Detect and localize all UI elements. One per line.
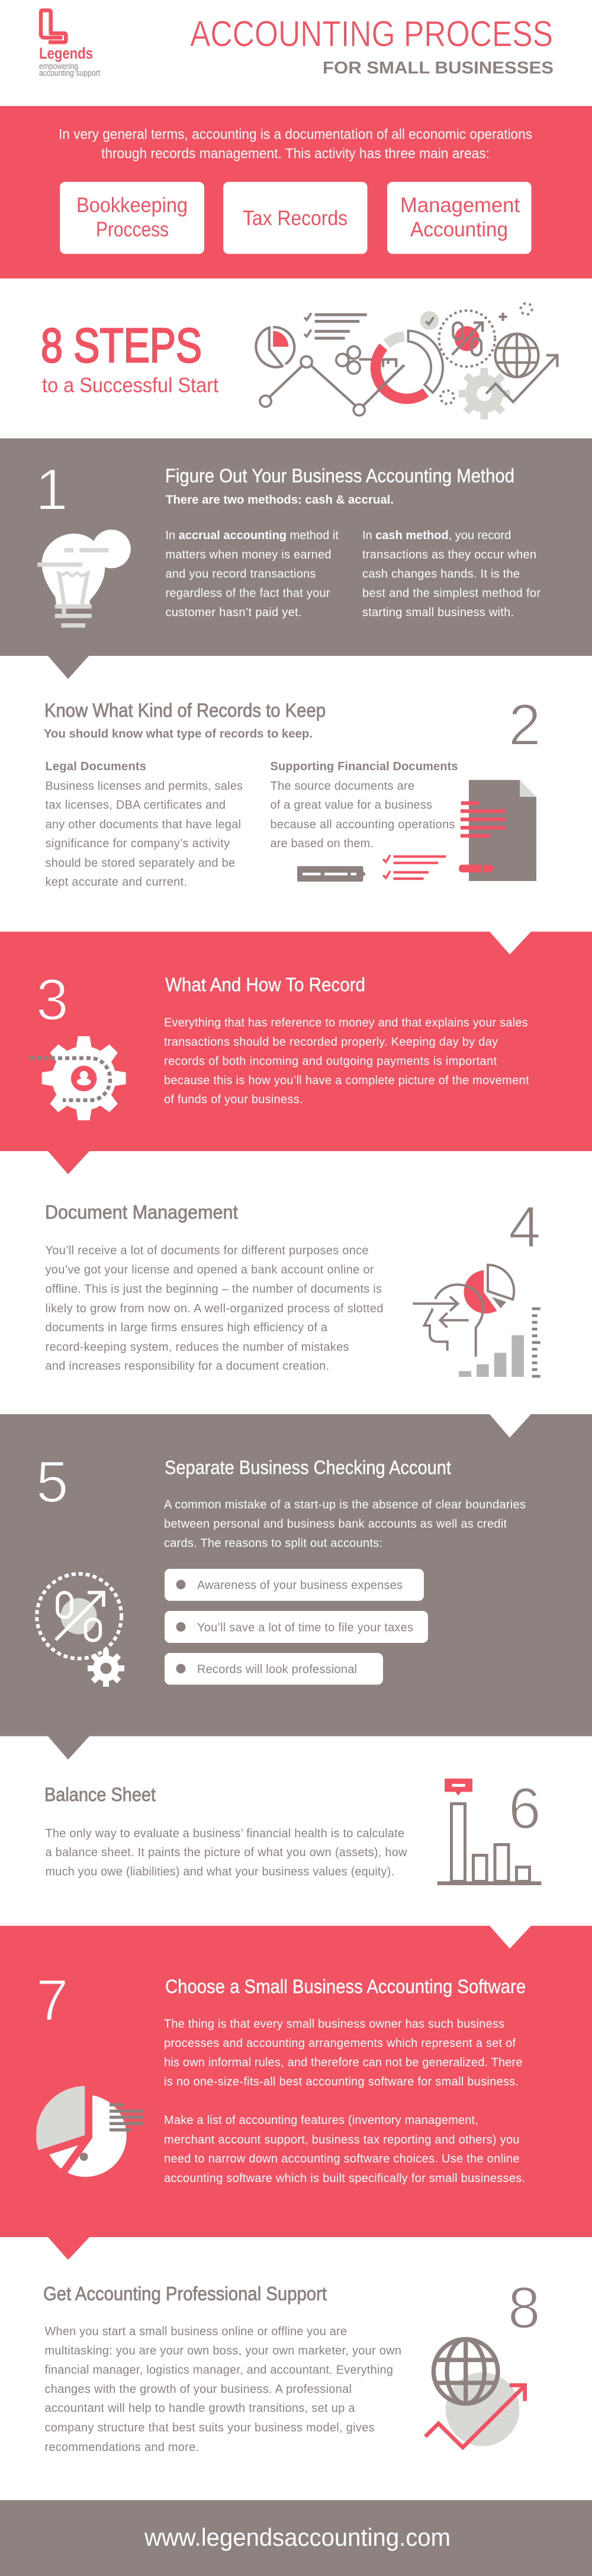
text: legal documents: Legal Documents [45,760,146,773]
intro text: through records management. This activity has three main areas: [101,146,490,162]
icon: L logo mark [41,11,66,42]
icon: percent circle [439,310,495,367]
text: professional support: accountant will help to handle growth transitions, set up a [45,2402,355,2415]
website URL: www.legendsaccounting.com [144,2523,451,2551]
text: what to record: because this is how you’ll have a complete picture of the movement [164,1074,529,1087]
logo tagline: accounting support [39,68,101,78]
text: software paragraph one: The thing is that every small business owner has such business [164,2018,504,2031]
list item 3: Records will look professional [197,1663,357,1676]
text: legal documents: significance for company’s activity [45,837,230,850]
text: common mistake: A common mistake of a start-up is the absence of clear boundaries [164,1498,526,1511]
list item 1 [165,1569,424,1601]
card: Management Accounting [387,182,532,254]
text: software paragraph one: processes and accounting arrangements which represent a set of [164,2037,516,2050]
number 2: 2 [509,692,541,757]
card: Management Accounting: Management [400,194,520,217]
text: accrual accounting: regardless of the fact that your [166,587,330,600]
number 3: 3 [36,967,69,1032]
panel: 8 steps [41,303,557,419]
subtitle: FOR SMALL BUSINESSES [323,59,554,78]
list item 3 [165,1653,383,1685]
footer [0,2500,592,2576]
text: software paragraph one: is no one-size-fits-all best accounting software for small business. [164,2075,519,2088]
text: document management: and increases responsibility for a document creation. [45,1360,329,1373]
icon: document [459,780,536,881]
text: cash method: best and the simplest method for [362,587,540,600]
logo: Legends [39,11,101,78]
heading: Separate Business Checking Account [165,1457,451,1478]
text: document management: documents in large firms ensures high efficiency of a [45,1321,328,1334]
icon: light gear [458,368,510,419]
text: document management: record-keeping system, reduces the number of mistakes [45,1341,349,1354]
logo tagline: empowering [39,62,78,71]
text: professional support: multitasking: you are your own boss, your own marketer, your own [45,2344,401,2357]
header [39,11,554,78]
intro text: In very general terms, accounting is a documentation of all economic operations [59,127,532,142]
text: document management: You’ll receive a lot of documents for different purposes once [45,1244,368,1257]
icon: plus [498,313,507,321]
text: professional support: When you start a small business online or offline you are [45,2325,347,2338]
panel: step 8 [43,2275,540,2454]
text: what to record: transactions should be recorded properly. Keeping day by day [164,1036,498,1049]
panel: intro three main areas [0,106,592,278]
text: professional support: changes with the growth of your business. A professional [45,2383,352,2396]
heading: 8 STEPS: 8 STEPS [41,319,202,373]
text: software paragraph two: Make a list of accounting features (inventory management, [164,2114,478,2127]
text: software paragraph one: his own informal rules, and therefore can not be generalized. There [164,2056,522,2069]
icon: dotted ring bottom [440,390,454,404]
panel: step 3 [0,931,592,1174]
icon: light bulb [37,530,131,627]
illustration: business icons [256,303,557,419]
text: what to record: records of both incoming and outgoing payments is important [164,1055,497,1068]
number 5: 5 [36,1449,69,1514]
panel: step 4 [45,1194,541,1377]
panel: step 2 [44,692,541,889]
text: cash method: starting small business with. [362,606,514,619]
card: Management Accounting: Accounting [410,218,508,241]
card: Tax Records [223,182,367,254]
icon: percent with gear [37,1574,124,1687]
icon: globe with growth arrow [425,2339,525,2447]
list item 1: Awareness of your business expenses [197,1579,403,1592]
text: legal documents: Business licenses and permits, sales [45,780,243,793]
text: balance sheet: The only way to evaluate a business’ financial health is to calculate [45,1827,404,1840]
heading: Figure Out Your Business Accounting Method [165,465,514,486]
text: accrual accounting: and you record transactions [166,568,316,581]
text: document management: offline. This is just the beginning – the number of documents is [45,1283,382,1296]
text: software paragraph two: merchant account support, business tax reporting and others) you [164,2133,520,2146]
text: common mistake: between personal and business bank accounts as well as credit [164,1518,507,1531]
heading: Balance Sheet [44,1784,156,1805]
icon: pie chart [256,327,294,367]
icon: pie chart with bars [36,2086,144,2177]
number 6: 6 [509,1776,541,1841]
text: supporting financial documents: are based on them. [270,837,374,850]
list item 2 [165,1611,428,1643]
panel: step 6 [44,1776,541,1885]
heading: Get Accounting Professional Support [43,2283,327,2305]
subheading: There are two methods: cash & accrual. [166,494,394,507]
text: balance sheet: much you owe (liabilities) and what your business values (equity). [45,1865,394,1878]
text: cash method: cash changes hands. It is the [362,568,520,581]
icon: head with charts [413,1265,540,1377]
text: software paragraph two: accounting software which is built specifically for small businesses. [164,2172,525,2185]
card: Bookkeeping Proccess: Proccess [96,218,169,241]
number 8: 8 [508,2275,540,2340]
text: legal documents: should be stored separately and be [45,857,235,870]
heading: What And How To Record [165,974,365,995]
subheading: You should know what type of records to keep. [44,728,313,741]
text: document management: you’ve got your license and opened a bank account online or [45,1264,374,1277]
panel: step 7 [0,1925,592,2260]
panel: step 5 [0,1414,592,1760]
number 7: 7 [36,1968,69,2033]
icon: dotted ring top [521,303,532,315]
logo wordmark: Legends [39,44,93,62]
text: supporting financial documents: Supporting Financial Documents [270,760,458,773]
icon: red checklist [383,855,446,880]
text: accrual accounting: In accrual accounting method it [166,529,339,542]
text: supporting financial documents: of a great value for a business [270,799,432,812]
icon: globe [496,334,538,377]
text: accrual accounting: matters when money is earned [166,549,332,562]
icon: gear with person [30,1036,126,1120]
icon: checklist [304,313,367,339]
icon: check badge [420,311,439,330]
text: what to record: Everything that has reference to money and that explains your sales [164,1017,528,1030]
text: legal documents: any other documents that have legal [45,818,241,831]
text: supporting financial documents: The source documents are [270,780,414,793]
number 4: 4 [509,1194,541,1260]
icon: label tag [297,866,366,882]
text: cash method: In cash method, you record [362,529,511,542]
text: what to record: of funds of your business. [164,1093,303,1106]
text: balance sheet: a balance sheet. It paints the picture of what you own (assets), how [45,1846,407,1859]
card: Bookkeeping Proccess: Bookkeeping [76,194,188,217]
list item 2: You’ll save a lot of time to file your taxes [197,1621,413,1634]
text: accrual accounting: customer hasn’t paid yet. [166,606,302,619]
card: Bookkeeping Proccess [60,182,204,254]
icon: donut chart [376,331,443,399]
text: document management: likely to grow from now on. A well-organized process of slotted [45,1302,384,1315]
icon: line chart [260,356,404,415]
card: Tax Records: Tax Records [243,207,348,230]
text: legal documents: tax licenses, DBA certificates and [45,799,226,812]
subheading: to a Successful Start [42,374,218,397]
text: cash method: transactions as they occur when [362,549,536,562]
icon: key [336,347,397,374]
text: professional support: company structure that best suits your business model, gives [45,2421,374,2434]
heading: Know What Kind of Records to Keep [44,700,326,721]
arrow: growth [486,355,557,402]
icon: bar chart [437,1779,541,1885]
panel: step 1 [0,438,592,679]
text: supporting financial documents: because all accounting operations [270,818,455,831]
text: software paragraph two: need to narrow down accounting software choices. Use the online [164,2152,520,2165]
text: professional support: recommendations and more. [45,2441,199,2454]
heading: Choose a Small Business Accounting Software [165,1976,526,1997]
text: legal documents: kept accurate and current. [45,876,187,889]
heading: Document Management [45,1202,238,1223]
text: professional support: financial manager, logistics manager, and accountant. Everything [45,2364,393,2377]
text: common mistake: cards. The reasons to split out accounts: [164,1537,382,1550]
number 1: 1 [36,457,68,522]
